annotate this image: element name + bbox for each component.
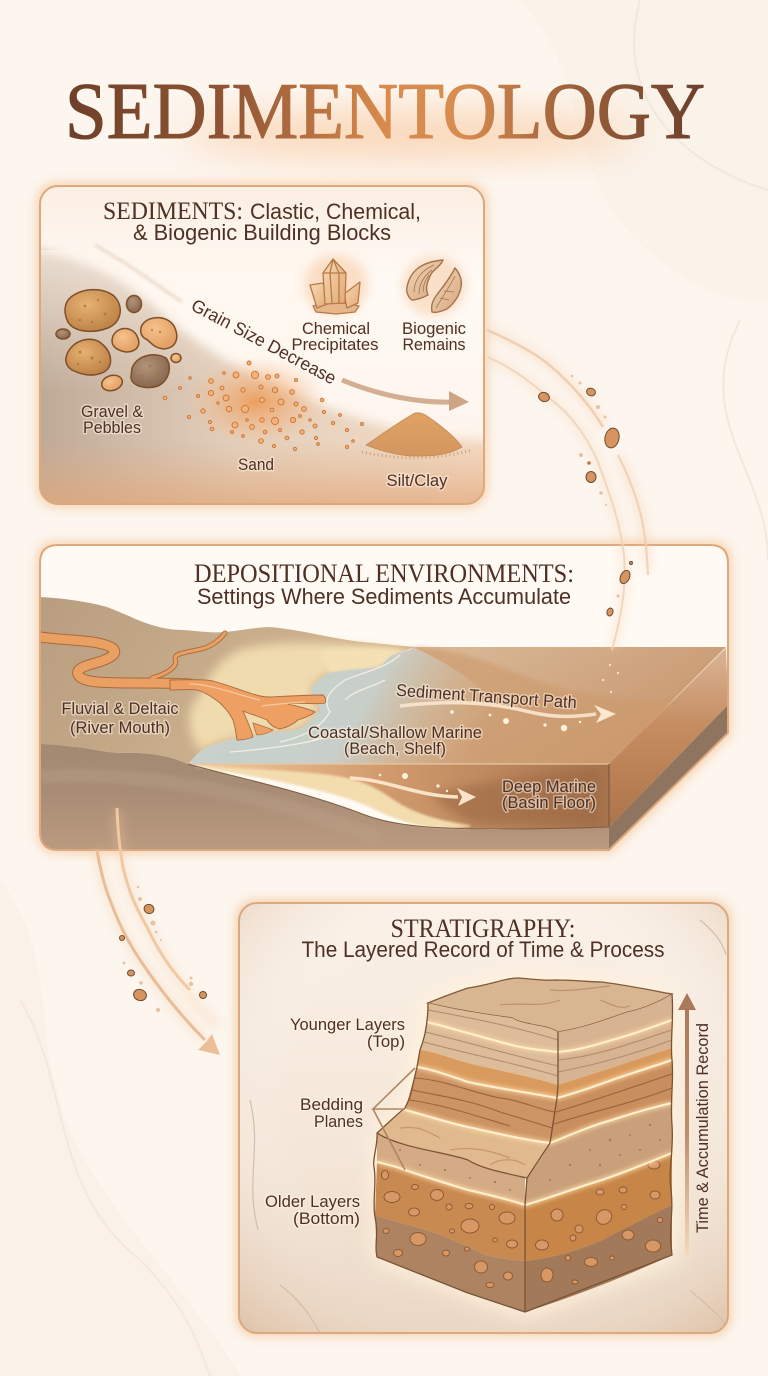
arrow: grain size decrease: Grain Size Decrease	[188, 295, 340, 388]
arrow: time and accumulation	[678, 993, 696, 1257]
panel: sediments	[30, 182, 494, 514]
icon: gravel and pebbles	[56, 290, 181, 393]
sandy orange band	[417, 1050, 558, 1098]
arrow: sediment transport path	[395, 681, 616, 731]
label: gravel and pebbles: Pebbles	[83, 418, 141, 437]
glowing bedding plane halos	[377, 1020, 672, 1205]
label: bedding planes: Bedding	[300, 1095, 363, 1114]
label: fluvial and deltaic: (River Mouth)	[70, 718, 170, 737]
speckled layer	[377, 1133, 525, 1205]
icon: biogenic shell remains	[402, 256, 466, 316]
pebbles	[382, 1161, 662, 1288]
label: older layers: (Bottom)	[293, 1209, 360, 1228]
label: sand: Sand	[238, 455, 274, 474]
label: coastal and shallow marine: Coastal/Shallow Marine	[308, 723, 482, 742]
icon: silt and clay pile	[362, 413, 472, 458]
label: coastal and shallow marine: (Beach, Shelf)	[344, 739, 446, 758]
heading: stratigraphy: STRATIGRAPHY:	[390, 914, 576, 943]
label: chemical precipitates: Precipitates	[292, 335, 378, 354]
label: fluvial and deltaic	[62, 699, 179, 737]
land	[40, 597, 415, 764]
label: biogenic remains: Remains	[402, 335, 466, 354]
label: bedding planes	[300, 1095, 363, 1131]
arrow: deep marine transport	[350, 773, 476, 806]
label: younger layers: Younger Layers	[290, 1015, 405, 1034]
block edges	[374, 994, 673, 1312]
wavy layer	[405, 1067, 557, 1143]
title: SEDIMENTOLOGY	[65, 68, 705, 156]
label: coastal and shallow marine	[308, 723, 482, 758]
icon: sand grains	[163, 356, 364, 451]
younger layers right face	[558, 994, 672, 1085]
front grey face	[40, 744, 609, 850]
side face	[609, 648, 728, 827]
icon: chemical precipitate crystals	[304, 255, 368, 315]
heading: stratigraphy: The Layered Record of Time & Process	[302, 937, 664, 962]
grey brown base layer	[375, 1215, 525, 1312]
front brown face	[188, 764, 609, 830]
label: time and accumulation record: Time & Accumulation Record	[693, 1023, 712, 1233]
sandy coastal plain	[189, 643, 405, 752]
title glow	[180, 115, 640, 155]
heading: depositional environments	[194, 559, 574, 609]
heading: sediments	[103, 198, 421, 245]
label: silt and clay: Silt/Clay	[386, 471, 448, 490]
river	[40, 633, 225, 684]
label: biogenic remains: Biogenic	[402, 319, 466, 338]
heading: depositional environments: Settings Where Sediments Accumulate	[197, 584, 571, 609]
illustration: layered rock block	[374, 978, 673, 1312]
heading: sediments: Clastic, Chemical,	[250, 199, 421, 224]
label: chemical precipitates	[292, 319, 378, 354]
glowing bedding plane lines	[377, 1020, 672, 1205]
label: deep marine: Deep Marine	[502, 777, 596, 796]
arrow: sediment transport path: Sediment Transport Path	[395, 681, 577, 712]
label: gravel and pebbles	[81, 402, 144, 437]
label: chemical precipitates: Chemical	[302, 319, 370, 338]
water	[188, 648, 482, 764]
heading: sediments: & Biogenic Building Blocks	[133, 220, 391, 245]
arrow: flow from depositional environments to stratigraphy	[97, 808, 220, 1055]
arrow: grain size decrease	[95, 245, 469, 411]
orange pebbly layer	[375, 1162, 525, 1261]
label: gravel and pebbles: Gravel &	[81, 402, 144, 421]
ledge	[377, 1110, 550, 1178]
heading: sediments: SEDIMENTS:	[103, 198, 243, 225]
panel: stratigraphy	[235, 899, 732, 1337]
label: bedding planes: Planes	[314, 1112, 363, 1131]
heading: depositional environments: DEPOSITIONAL ENVIRONMENTS:	[194, 559, 574, 588]
arrow: flow from sediments to depositional environments	[487, 330, 648, 693]
callout lines: bedding planes	[373, 1068, 415, 1170]
label: older layers: Older Layers	[265, 1192, 360, 1211]
block top surface	[428, 978, 672, 1032]
label: fluvial and deltaic: Fluvial & Deltaic	[62, 699, 179, 718]
sea surface	[254, 647, 726, 764]
label: biogenic remains	[402, 319, 466, 354]
label: younger layers	[290, 1015, 405, 1051]
panel: depositional environments	[36, 541, 732, 855]
label: younger layers: (Top)	[367, 1032, 405, 1051]
label: deep marine: (Basin Floor)	[502, 793, 596, 812]
younger layers left face	[420, 1003, 558, 1085]
label: deep marine	[502, 777, 596, 812]
heading: stratigraphy	[302, 914, 664, 962]
label: older layers	[265, 1192, 360, 1228]
